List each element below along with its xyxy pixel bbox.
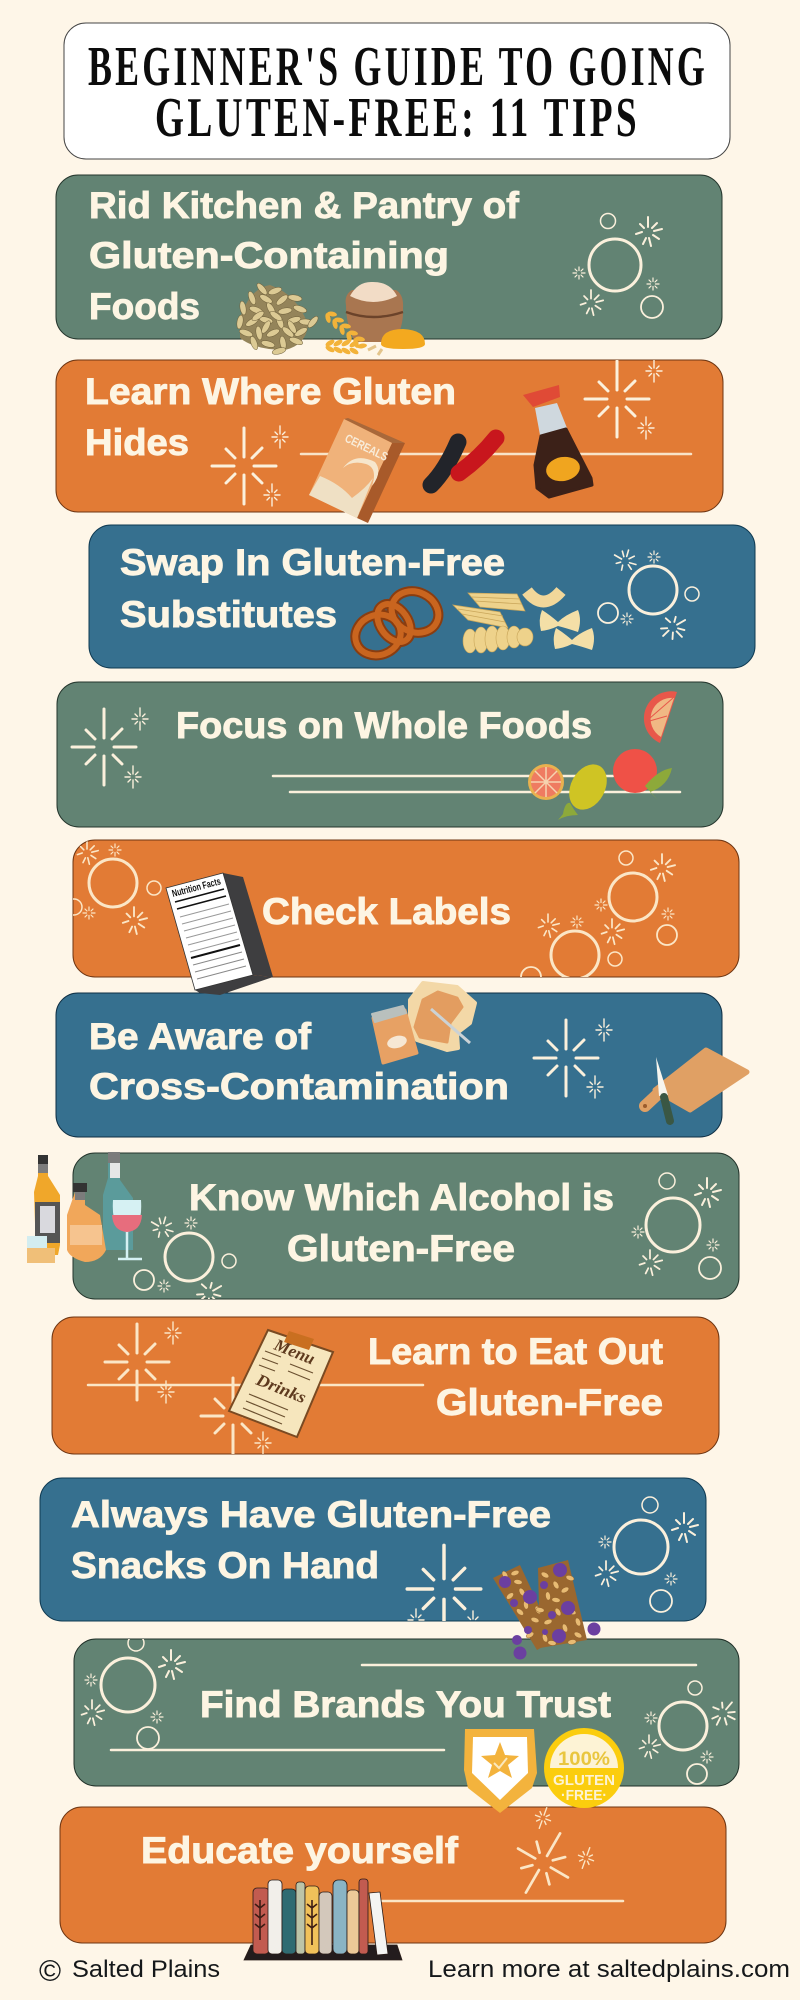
icon: peanut butter and toast <box>372 983 475 1063</box>
heading: tip 2: Hides <box>85 422 189 463</box>
heading: tip 9: Always Have Gluten-Free <box>71 1494 551 1535</box>
panel: tip 7 <box>73 1153 739 1311</box>
heading: tip 2 <box>85 371 456 463</box>
icon: cutting board and knife <box>643 1050 747 1121</box>
heading: tip 4: Focus on Whole Foods <box>176 705 592 746</box>
icon: granola bars <box>493 1560 600 1660</box>
heading: tip 6 <box>89 1016 509 1107</box>
heading: tip 3: Substitutes <box>120 594 337 635</box>
panel: tip 2 <box>56 360 723 512</box>
icon: 100% gluten free badge <box>544 1728 624 1808</box>
footer: learn more: Learn more at saltedplains.com <box>428 1956 790 1983</box>
icon: soy sauce bottle <box>523 385 592 497</box>
decoration: bubbles <box>598 545 699 645</box>
icon: alcohol bottles and wine glass <box>27 1152 142 1263</box>
decoration: sparkles and lines <box>72 708 680 792</box>
icon: nutrition facts box <box>166 873 273 995</box>
heading: tip 8 <box>368 1331 663 1423</box>
icon: shield with star <box>464 1729 537 1813</box>
heading: tip 6: Cross-Contamination <box>89 1066 509 1107</box>
icon: 100% gluten free badge: ·FREE· <box>561 1787 607 1804</box>
heading: tip 3: Swap In Gluten-Free <box>120 542 505 583</box>
icon: 100% gluten free badge: 100% <box>558 1749 610 1770</box>
heading: tip 7 <box>189 1177 614 1269</box>
panel: tip 11 <box>60 1805 726 1943</box>
icon: licorice <box>431 438 496 485</box>
footer: copyright: Salted Plains <box>72 1956 220 1983</box>
heading: tip 3 <box>120 542 505 635</box>
panel: tip 8 <box>52 1317 719 1454</box>
decoration: bubbles <box>573 214 663 318</box>
decoration: sparkles <box>534 1019 612 1098</box>
label: cereals: CEREALS <box>343 431 390 464</box>
heading: tip 1: Rid Kitchen & Pantry of <box>89 185 520 226</box>
heading: tip 8: Learn to Eat Out <box>368 1331 663 1372</box>
heading: tip 7: Gluten-Free <box>287 1228 515 1269</box>
icon: pretzel <box>350 584 445 662</box>
heading: tip 1 <box>89 185 520 327</box>
icon: cereal box <box>309 418 405 523</box>
heading: tip 9 <box>71 1494 551 1586</box>
heading: tip 6: Be Aware of <box>89 1016 312 1057</box>
label: menu: Menu <box>271 1335 318 1368</box>
panel: tip 6 <box>56 993 722 1137</box>
decoration: sparkles and line <box>380 1805 623 1907</box>
heading: tip 1: Foods <box>89 286 200 327</box>
panel: tip 4 <box>57 682 723 827</box>
icon: citrus and fruits <box>528 691 677 820</box>
panel: tip 9 <box>40 1478 706 1633</box>
footer: copyright: © <box>39 1955 61 1988</box>
icon: grains heap <box>236 282 320 356</box>
decoration: bubbles <box>134 1173 721 1311</box>
label: drinks: Drinks <box>253 1370 309 1407</box>
panel: tip 1 <box>56 175 722 339</box>
panel: tip 10 <box>74 1635 742 1786</box>
heading: tip 5: Check Labels <box>262 891 511 932</box>
decoration: bubbles <box>66 841 677 987</box>
footer: copyright <box>39 1955 220 1988</box>
icon: books on shelf <box>244 1879 402 1960</box>
heading: tip 7: Know Which Alcohol is <box>189 1177 614 1218</box>
title <box>64 23 730 159</box>
icon: pasta <box>453 591 594 653</box>
panel: tip 5 <box>66 840 739 987</box>
decoration: sparkles and line <box>88 1322 423 1454</box>
decoration: bubbles and sparkles <box>407 1497 698 1633</box>
decoration: sparkles and line <box>212 360 691 506</box>
decoration: bubbles and lines <box>82 1635 742 1784</box>
panel: tip 3 <box>89 525 755 668</box>
icon: flour sack, wheat and bread <box>324 282 425 356</box>
heading: tip 11: Educate yourself <box>141 1830 459 1871</box>
heading: tip 8: Gluten-Free <box>436 1382 663 1423</box>
icon: menu clipboard <box>229 1330 333 1437</box>
icon: 100% gluten free badge: GLUTEN <box>553 1772 615 1789</box>
heading: tip 1: Gluten-Containing <box>89 235 449 276</box>
heading: tip 10: Find Brands You Trust <box>200 1684 611 1725</box>
heading: tip 9: Snacks On Hand <box>71 1545 379 1586</box>
label: nutrition facts: Nutrition Facts <box>171 876 222 900</box>
heading: tip 2: Learn Where Gluten <box>85 371 456 412</box>
